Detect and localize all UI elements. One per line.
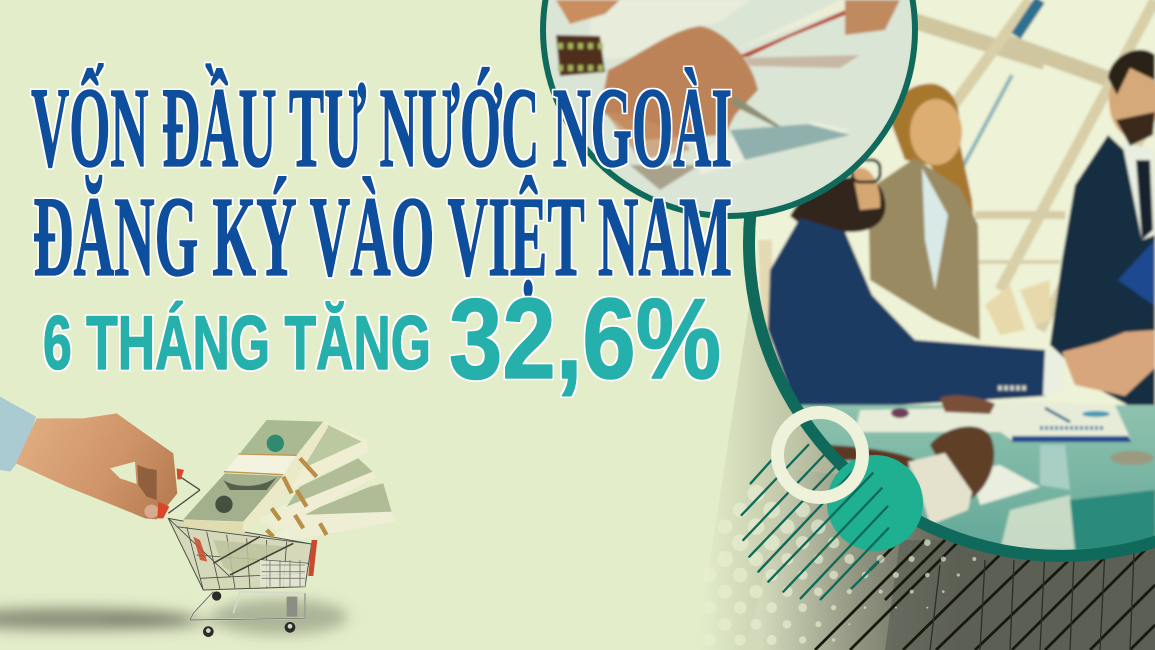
label: 6 THÁNG TĂNG xyxy=(43,301,431,386)
shirt sleeve xyxy=(0,397,36,472)
subtitle: 6 months increase xyxy=(43,276,721,403)
illustration: hand pushing cart of money xyxy=(0,397,395,637)
percentage value: 32,6% xyxy=(449,276,721,403)
halftone dots xyxy=(702,485,976,647)
glass table xyxy=(800,405,1155,565)
man on left xyxy=(790,177,885,232)
handshake xyxy=(1062,330,1155,396)
document photo scene xyxy=(546,0,912,213)
panel: document photo in small circle xyxy=(540,0,920,240)
decorative teal circle xyxy=(827,455,923,551)
money inside basket xyxy=(213,537,307,587)
building backdrop xyxy=(696,270,1155,650)
hand xyxy=(16,413,177,519)
cart wheels and red grips xyxy=(157,468,317,637)
handshake photo scene xyxy=(740,0,1155,565)
man on right xyxy=(1050,135,1155,420)
diagonal green stripes xyxy=(742,445,888,599)
shopping cart xyxy=(168,477,312,620)
cart shadow xyxy=(0,599,348,635)
decorative ring xyxy=(778,412,862,498)
title xyxy=(31,64,732,300)
woman xyxy=(891,82,974,215)
large circle border xyxy=(743,0,1155,562)
small circle border xyxy=(540,0,918,219)
panel: handshake photo in large circle xyxy=(740,0,1155,565)
money stacks xyxy=(183,420,395,540)
